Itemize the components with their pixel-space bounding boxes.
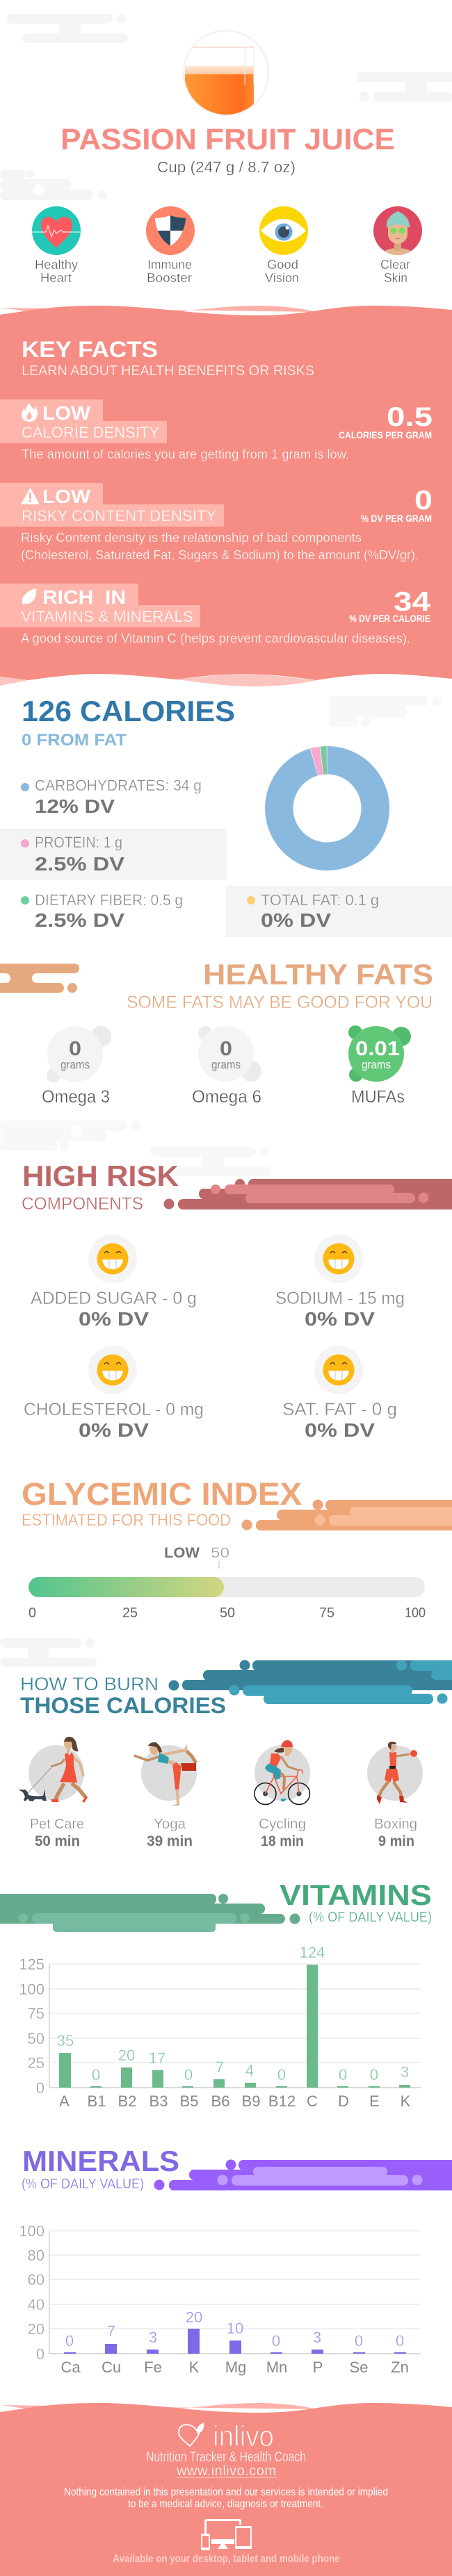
- activity: pet care: 50 min: [35, 1833, 80, 1849]
- fact: calorie density: [0, 399, 433, 461]
- activity: boxing: Boxing: [374, 1817, 417, 1832]
- bar chart: vitamins: B6: [211, 2092, 229, 2110]
- heading: high risk: HIGH RISK: [22, 1159, 179, 1192]
- fat badge: mufas: [348, 1025, 411, 1107]
- fat badge: omega 6: Omega 6: [192, 1087, 261, 1107]
- gauge: glycemic index: 0: [29, 1605, 36, 1621]
- gauge: glycemic index: 50: [220, 1605, 235, 1621]
- disclaimer: to be a medical advice, diagnosis or treatment.: [128, 2498, 323, 2510]
- bar chart: minerals: P: [313, 2359, 323, 2376]
- bar chart: vitamins: 25: [28, 2054, 45, 2072]
- bar chart: minerals: K: [189, 2359, 200, 2376]
- fact: calorie density: CALORIE DENSITY: [22, 424, 159, 441]
- bar chart: vitamins: D: [338, 2092, 349, 2110]
- risk: cholesterol: CHOLESTEROL - 0 mg: [24, 1400, 204, 1419]
- icon: devices: [201, 2519, 252, 2550]
- macro background stripes: [0, 829, 452, 937]
- bar chart: minerals: Mg: [225, 2359, 246, 2376]
- bar chart: minerals: 80: [28, 2247, 45, 2264]
- icon: good vision eye: [259, 206, 308, 255]
- label: good vision: Vision: [265, 271, 299, 285]
- bar chart: minerals: Mn: [266, 2359, 287, 2376]
- risk: sodium: 0% DV: [305, 1308, 375, 1330]
- bar chart: vitamins: 20: [118, 2047, 135, 2064]
- bar chart: vitamins: E: [369, 2092, 380, 2110]
- disclaimer: Nothing contained in this presentation and our services is intended or implied: [64, 2486, 388, 2498]
- activity: pet care: [18, 1737, 88, 1849]
- macro: carbohydrates: CARBOHYDRATES: 34 g: [35, 777, 202, 794]
- fat badge: omega 3: grams: [60, 1058, 90, 1071]
- macro: total fat: 0% DV: [261, 909, 331, 931]
- macro: dietary fiber: 2.5% DV: [35, 909, 124, 931]
- fat badge: mufas: 0.01: [355, 1038, 400, 1060]
- label: healthy heart: Healthy: [35, 258, 78, 272]
- bar chart: minerals: 60: [28, 2271, 45, 2288]
- bar chart: minerals: 20: [186, 2309, 202, 2326]
- heading: calories: 126 CALORIES: [22, 695, 235, 727]
- bar chart: vitamins: B5: [180, 2092, 198, 2110]
- icon: clear skin: [373, 206, 422, 255]
- heading: those calories: THOSE CALORIES: [20, 1693, 226, 1718]
- macro: carbohydrates: 12% DV: [35, 795, 115, 817]
- bar chart: vitamins: B9: [242, 2092, 260, 2110]
- fact: risky content density: Risky Content density is the relationship of bad components: [21, 531, 362, 545]
- bar chart: vitamins: 75: [28, 2005, 45, 2022]
- label: clear skin: Skin: [384, 271, 407, 285]
- risk: added sugar: ADDED SUGAR - 0 g: [31, 1289, 197, 1308]
- activity: boxing: 9 min: [378, 1833, 414, 1849]
- activity: yoga: [134, 1742, 197, 1849]
- subheading: vitamins daily value: (% OF DAILY VALUE): [309, 1910, 432, 1925]
- bar chart: minerals: 3: [149, 2329, 157, 2346]
- label: good vision: Good: [267, 258, 298, 272]
- bar chart: vitamins: 4: [245, 2062, 254, 2079]
- logo: inlivo: [179, 2420, 274, 2452]
- fact: risky content density: (Cholesterol, Saturated Fat, Sugars & Sodium) to the amount (%DV/gr).: [21, 548, 419, 562]
- bar chart: minerals: 100: [19, 2222, 45, 2240]
- fact: rich in vitamins and minerals: VITAMINS & MINERALS: [21, 608, 193, 625]
- bar chart: vitamins: 17: [149, 2049, 166, 2067]
- fact: calorie density: 0.5: [387, 402, 433, 432]
- bar chart: minerals: Fe: [144, 2359, 162, 2376]
- activity: cycling: 18 min: [261, 1833, 304, 1849]
- fact: risky content density: 0: [414, 486, 433, 515]
- bar chart: vitamins: 3: [401, 2063, 409, 2081]
- donut chart: calorie breakdown: [265, 746, 389, 870]
- heading: vitamins: VITAMINS: [280, 1879, 432, 1911]
- fact: calorie density: CALORIES PER GRAM: [339, 430, 432, 440]
- heading: glycemic index: GLYCEMIC INDEX: [22, 1476, 302, 1512]
- tagline: Nutrition Tracker & Health Coach: [146, 2450, 306, 2465]
- bar chart: vitamins: [19, 1944, 421, 2110]
- bar chart: vitamins: 35: [57, 2032, 74, 2049]
- heading: key facts: KEY FACTS: [22, 337, 158, 362]
- fat badge: omega 6: [192, 1026, 261, 1107]
- subheading: minerals daily value: (% OF DAILY VALUE): [22, 2177, 144, 2192]
- bar chart: vitamins: B1: [88, 2092, 106, 2110]
- activity: yoga: Yoga: [154, 1817, 186, 1832]
- fact: rich in vitamins and minerals: RICH IN: [42, 586, 126, 608]
- fact: risky content density: [0, 483, 433, 562]
- bar chart: vitamins: 7: [216, 2058, 224, 2076]
- heading: minerals: MINERALS: [22, 2145, 179, 2177]
- activity: cycling: Cycling: [259, 1817, 306, 1832]
- bar chart: minerals: Ca: [60, 2359, 81, 2376]
- gauge: glycemic index: 100: [405, 1605, 426, 1621]
- fact: calorie density: LOW: [42, 402, 91, 424]
- macro: protein: 2.5% DV: [35, 853, 124, 875]
- bar chart: vitamins: 0: [36, 2079, 45, 2097]
- heading: how to burn: HOW TO BURN: [20, 1674, 159, 1694]
- icon: healthy heart: [32, 206, 81, 255]
- title: PASSION FRUIT JUICE: [60, 123, 395, 156]
- bar chart: vitamins: 125: [19, 1956, 45, 1973]
- bar chart: vitamins: 0: [184, 2066, 193, 2083]
- panel: footer: [0, 2403, 452, 2576]
- fat badge: mufas: grams: [362, 1058, 391, 1071]
- fat badge: mufas: MUFAs: [351, 1087, 405, 1107]
- subheading: healthy fats: SOME FATS MAY BE GOOD FOR YOU: [127, 993, 433, 1012]
- bar chart: minerals: Se: [350, 2359, 368, 2376]
- juice glass photo: [184, 31, 268, 118]
- fat badge: omega 3: 0: [69, 1038, 81, 1060]
- bar chart: minerals: 10: [227, 2320, 243, 2337]
- benefits row: [32, 206, 422, 285]
- bar chart: minerals: 0: [355, 2332, 363, 2350]
- bar chart: minerals: Zn: [391, 2359, 409, 2376]
- fact: rich in vitamins and minerals: A good source of Vitamin C (helps prevent cardiovascular diseases).: [21, 631, 410, 645]
- risk: saturated fat: [282, 1346, 397, 1441]
- bar chart: vitamins: 0: [339, 2066, 347, 2083]
- bar chart: vitamins: C: [307, 2092, 318, 2110]
- risk: added sugar: [31, 1235, 197, 1330]
- gauge: glycemic index: 75: [319, 1605, 334, 1621]
- fact: rich in vitamins and minerals: 34: [394, 587, 430, 617]
- fact: rich in vitamins and minerals: [0, 584, 430, 645]
- activity: yoga: 39 min: [147, 1833, 193, 1849]
- subheading: components: COMPONENTS: [22, 1194, 143, 1214]
- bar chart: minerals: 0: [65, 2332, 74, 2350]
- bar chart: vitamins: B12: [268, 2092, 296, 2110]
- fat badge: omega 6: 0: [220, 1038, 232, 1060]
- gauge: glycemic index: 50: [211, 1545, 229, 1561]
- disclaimer: [64, 2486, 388, 2510]
- macro: total fat: TOTAL FAT: 0.1 g: [261, 891, 379, 909]
- bar chart: vitamins: 0: [370, 2066, 378, 2083]
- bar chart: vitamins: A: [59, 2092, 70, 2110]
- subheading: estimated: ESTIMATED FOR THIS FOOD: [22, 1511, 231, 1530]
- label: healthy heart: Heart: [40, 271, 72, 285]
- icon: immune booster shield: [146, 206, 195, 255]
- bar chart: minerals: Cu: [102, 2359, 121, 2376]
- risk: saturated fat: 0% DV: [305, 1419, 375, 1441]
- label: clear skin: Clear: [380, 258, 410, 272]
- risk: cholesterol: 0% DV: [79, 1419, 149, 1441]
- label: immune booster: Immune: [147, 258, 192, 272]
- availability note: Available on your desktop, tablet and mobile phone: [113, 2553, 340, 2565]
- bar chart: minerals: 3: [313, 2329, 321, 2346]
- macro: dietary fiber: [21, 891, 183, 931]
- bar chart: minerals: 0: [36, 2345, 45, 2363]
- bar chart: minerals: 0: [396, 2332, 404, 2350]
- risk: cholesterol: [24, 1346, 204, 1441]
- risk: sodium: SODIUM - 15 mg: [275, 1289, 405, 1308]
- fact: calorie density: The amount of calories you are getting from 1 gram is low.: [22, 447, 349, 461]
- bar chart: minerals: [19, 2222, 421, 2376]
- bar chart: vitamins: 100: [19, 1981, 45, 1998]
- bar chart: minerals: 0: [272, 2332, 280, 2350]
- gauge: glycemic index: 25: [122, 1605, 138, 1621]
- bar chart: vitamins: B3: [150, 2092, 168, 2110]
- bar chart: minerals: 40: [28, 2296, 45, 2313]
- bar chart: vitamins: 50: [28, 2030, 45, 2047]
- activity: cycling: [255, 1740, 310, 1849]
- bar chart: minerals: 7: [107, 2322, 115, 2340]
- macro: dietary fiber: DIETARY FIBER: 0.5 g: [35, 891, 183, 909]
- risk: added sugar: 0% DV: [79, 1308, 149, 1330]
- website link: www.inlivo.com: [176, 2463, 276, 2479]
- fact: rich in vitamins and minerals: % DV PER CALORIE: [349, 613, 430, 624]
- fact: risky content density: LOW: [42, 486, 91, 507]
- fact: risky content density: RISKY CONTENT DENSITY: [22, 507, 216, 525]
- bar chart: vitamins: 0: [92, 2066, 100, 2083]
- fat badge: omega 6: grams: [211, 1058, 241, 1071]
- gauge: glycemic index: [29, 1545, 426, 1621]
- bar chart: vitamins: 124: [300, 1944, 325, 1961]
- risk: saturated fat: SAT. FAT - 0 g: [282, 1400, 397, 1419]
- macro: protein: PROTEIN: 1 g: [35, 834, 122, 851]
- macro: carbohydrates: [21, 777, 202, 817]
- macro: protein: [21, 834, 124, 875]
- bar chart: vitamins: B2: [118, 2092, 136, 2110]
- fat badge: omega 3: Omega 3: [42, 1087, 110, 1107]
- bar chart: minerals: 20: [28, 2320, 45, 2338]
- heading: healthy fats: HEALTHY FATS: [203, 958, 433, 991]
- macro: total fat: [247, 891, 379, 931]
- activity: pet care: Pet Care: [30, 1817, 84, 1832]
- fat badge: omega 3: [42, 1026, 111, 1107]
- label: immune booster: Booster: [147, 271, 192, 285]
- subheading: LEARN ABOUT HEALTH BENEFITS OR RISKS: [22, 363, 314, 379]
- fact: risky content density: % DV PER GRAM: [361, 513, 432, 524]
- bar chart: vitamins: K: [401, 2092, 411, 2110]
- serving size: Cup (247 g / 8.7 oz): [157, 158, 296, 176]
- bar chart: vitamins: 0: [277, 2066, 286, 2083]
- activity: boxing: [367, 1742, 423, 1849]
- logo: inlivo: inlivo: [213, 2420, 274, 2452]
- subheading: calories from fat: 0 FROM FAT: [22, 731, 127, 750]
- risk: sodium: [275, 1235, 405, 1330]
- gauge: glycemic index: LOW: [164, 1545, 200, 1561]
- panel: key facts: [0, 306, 452, 686]
